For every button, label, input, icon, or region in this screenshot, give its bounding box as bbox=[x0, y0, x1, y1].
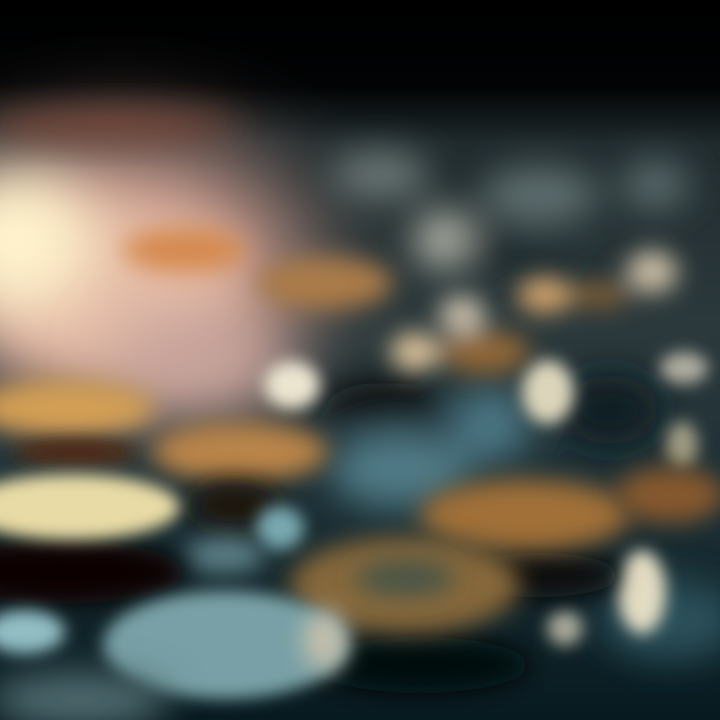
saucer: bottom blue bbox=[0, 591, 347, 720]
white highlights bbox=[264, 352, 708, 646]
light glow bbox=[0, 111, 310, 410]
orange pastries, upper bbox=[123, 228, 678, 374]
cup: top left bbox=[0, 380, 155, 465]
background cups, right side bbox=[320, 150, 720, 660]
cup: lower right orange bbox=[420, 467, 720, 597]
cup: bottom center bbox=[290, 537, 530, 693]
cup: large cream, lower left bbox=[0, 474, 185, 604]
cup: center left bbox=[152, 422, 328, 573]
